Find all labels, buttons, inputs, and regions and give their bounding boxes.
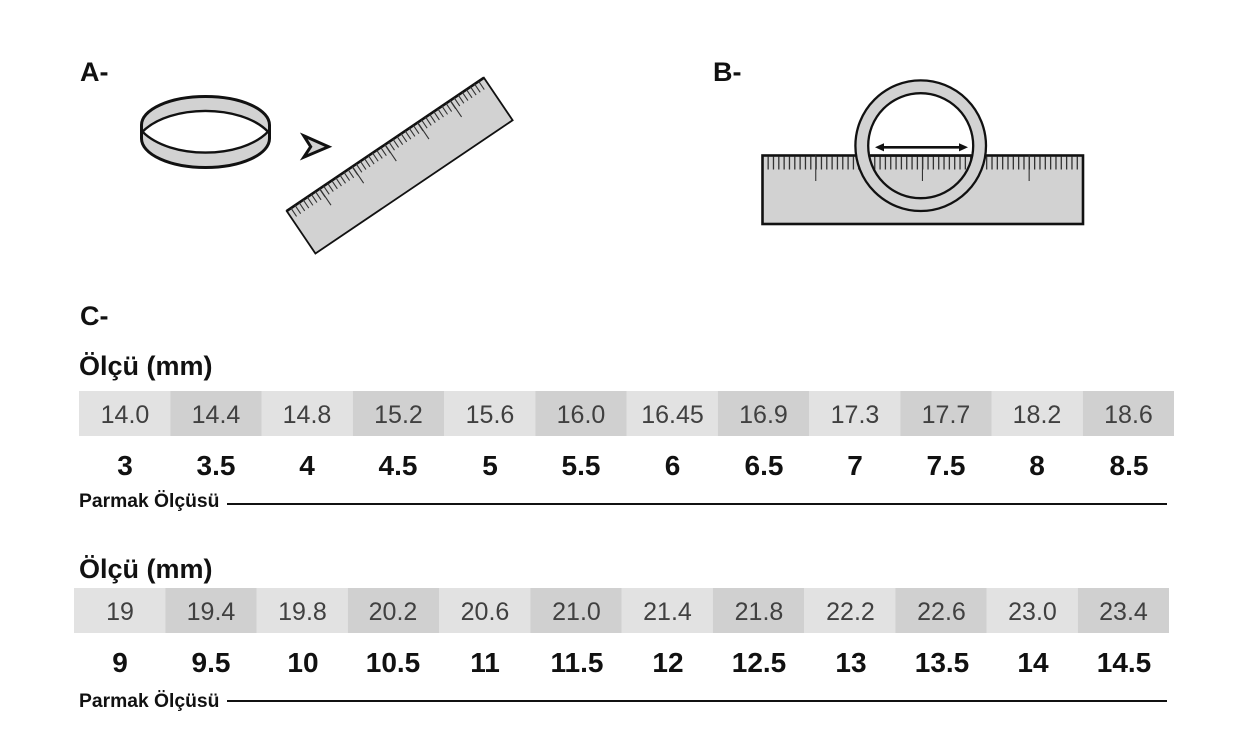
row: ring sizes: 8: [1029, 450, 1045, 481]
ruler edge inside ring: [869, 154, 972, 157]
row: millimetre values: 18.6: [1104, 401, 1153, 429]
row: ring sizes: 7.5: [927, 450, 965, 481]
row: millimetre values: 22.6: [917, 598, 966, 626]
row: ring sizes: 9.5: [192, 647, 230, 678]
row: ring sizes: 6.5: [745, 450, 783, 481]
heading: B: B-: [713, 57, 742, 87]
row: millimetre values: 16.45: [641, 401, 704, 429]
row: ring sizes: 4: [299, 450, 315, 481]
caption: finger size: Parmak Ölçüsü: [79, 489, 219, 512]
row: ring sizes: 9: [112, 647, 128, 678]
row: ring sizes: 11: [470, 647, 500, 678]
row: ring sizes: 10.5: [366, 647, 420, 678]
row: millimetre values: 21.4: [643, 598, 692, 626]
row: millimetre values: 18.2: [1013, 401, 1061, 429]
row: millimetre values: 14.4: [192, 401, 240, 429]
row: millimetre values: 16.0: [557, 401, 605, 429]
row: millimetre values: 19: [106, 598, 134, 626]
row: ring sizes: 12.5: [732, 647, 786, 678]
row heading: millimetres: Ölçü (mm): [79, 351, 213, 381]
icon: straight ruler: [762, 156, 1083, 224]
row: ring sizes: 14: [1017, 647, 1049, 678]
caption: finger size: Parmak Ölçüsü: [79, 689, 219, 712]
table: sizes 3 to 8.5: [79, 351, 1174, 512]
row: ring sizes: 5.5: [562, 450, 600, 481]
row: millimetre values: 16.9: [739, 401, 788, 429]
row: ring sizes: 14.5: [1097, 647, 1151, 678]
row: millimetre values: [79, 391, 1174, 436]
row: millimetre values: 22.2: [826, 598, 875, 626]
row: ring sizes: [117, 450, 1148, 481]
row: ring sizes: 12: [652, 647, 684, 678]
row: ring sizes: 3.5: [197, 450, 235, 481]
arrow: inner diameter: [875, 143, 968, 151]
row: millimetre values: 23.4: [1099, 598, 1148, 626]
row: ring sizes: 11.5: [551, 647, 603, 678]
row: millimetre values: 14.8: [283, 401, 331, 429]
icon: arrow pointing to ruler: [304, 136, 328, 157]
row heading: millimetres: Ölçü (mm): [79, 554, 213, 584]
icon: paper band ring: [142, 96, 270, 168]
row: millimetre values: 20.2: [369, 598, 417, 626]
row: millimetre values: 21.8: [735, 598, 783, 626]
row: ring sizes: 13.5: [915, 647, 969, 678]
row: ring sizes: 10: [287, 647, 319, 678]
icon: tilted ruler: [287, 78, 513, 254]
row: millimetre values: 14.0: [101, 401, 149, 429]
row: ring sizes: 4.5: [379, 450, 417, 481]
row: millimetre values: 17.7: [922, 401, 970, 429]
heading: A: A-: [80, 57, 108, 87]
table: sizes 9 to 14.5: [74, 554, 1169, 712]
row: millimetre values: 19.4: [187, 598, 235, 626]
row: millimetre values: 15.2: [374, 401, 423, 429]
panel: step B: [713, 57, 1083, 224]
row: ring sizes: 6: [665, 450, 680, 481]
icon: ring on ruler: [855, 80, 986, 211]
row: millimetre values: 19.8: [278, 598, 327, 626]
row: millimetre values: 17.3: [831, 401, 879, 429]
row: ring sizes: [112, 647, 1151, 678]
inner ring opening above ruler: [870, 113, 972, 154]
heading: C: C-: [80, 301, 108, 331]
row: millimetre values: 23.0: [1008, 598, 1057, 626]
row: ring sizes: 5: [482, 450, 498, 481]
row: millimetre values: 15.6: [466, 401, 514, 429]
row: millimetre values: [74, 588, 1169, 633]
row: ring sizes: 13: [835, 647, 867, 678]
row: millimetre values: 21.0: [552, 598, 601, 626]
row: ring sizes: 3: [117, 450, 133, 481]
row: ring sizes: 7: [847, 450, 863, 481]
panel: step C: [74, 301, 1174, 712]
panel: step A: [80, 57, 513, 254]
row: millimetre values: 20.6: [461, 598, 509, 626]
row: ring sizes: 8.5: [1110, 450, 1148, 481]
